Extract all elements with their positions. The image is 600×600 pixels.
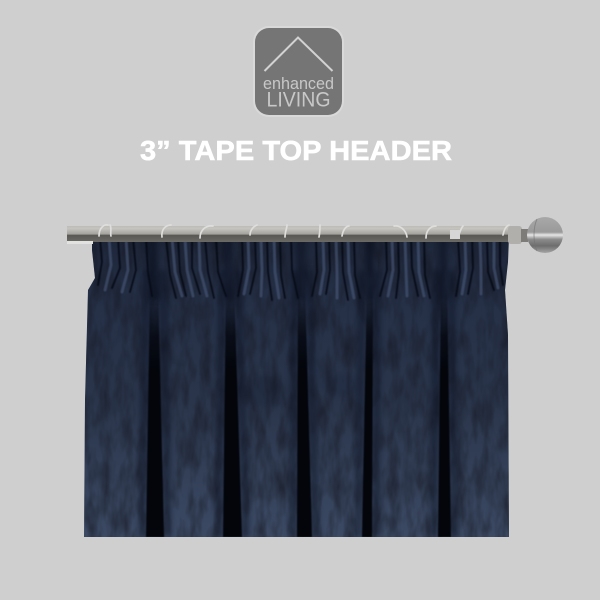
soft shading in upper curtain [148, 242, 446, 298]
panel edge shading [138, 270, 459, 537]
curtain fabric [80, 235, 515, 540]
icon: house roof [264, 38, 332, 71]
ring clip [450, 230, 460, 239]
curtain [80, 235, 515, 540]
rod bracket and collar [508, 226, 528, 244]
curtain rod [67, 226, 515, 244]
finial ball [527, 217, 563, 253]
logo: enhanced living [253, 26, 344, 117]
logo word: LIVING: LIVING [266, 88, 330, 112]
logo word: enhanced: enhanced [263, 75, 334, 93]
deep folds [146, 285, 451, 537]
curtain rings [99, 225, 509, 238]
pencil pleats [98, 238, 503, 300]
infographic canvas [67, 26, 563, 537]
title: 3” TAPE TOP HEADER [140, 135, 452, 166]
